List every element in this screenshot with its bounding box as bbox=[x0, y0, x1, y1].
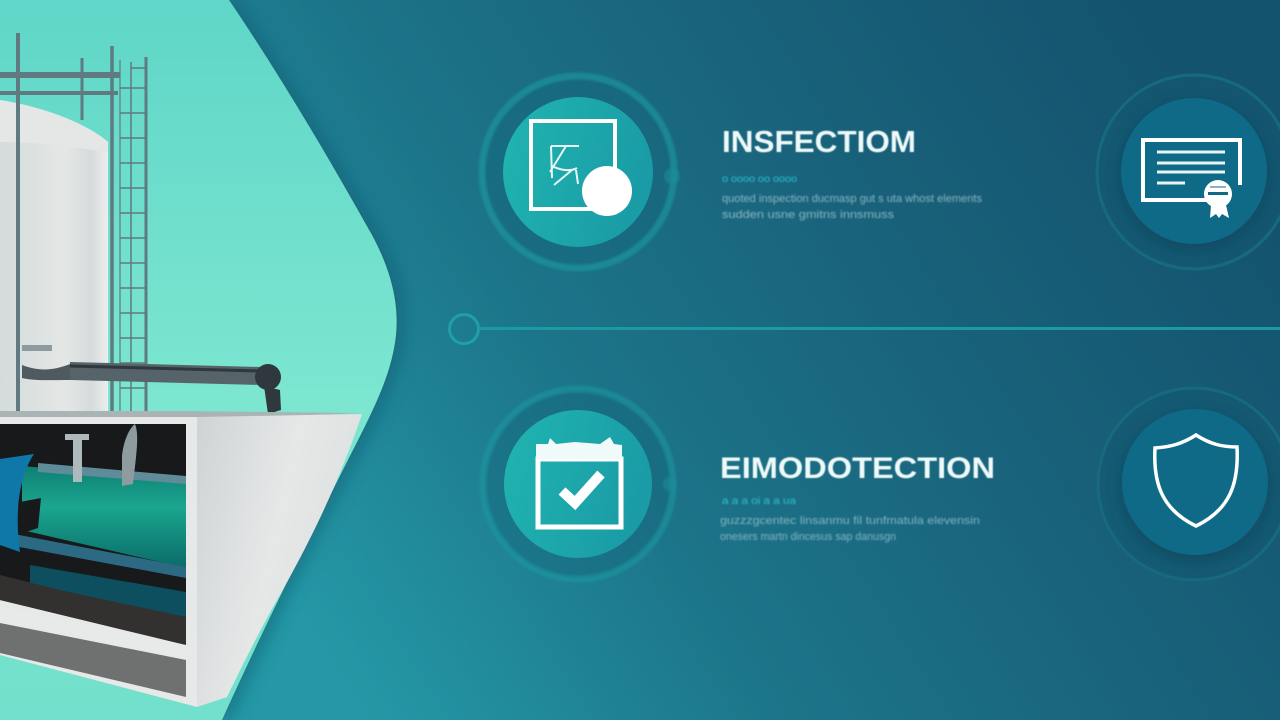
grey shelf strip bbox=[0, 575, 186, 645]
timeline node bbox=[450, 314, 478, 344]
panel: mint shape bbox=[0, 0, 397, 720]
label: inspection: o oooo oo oooo bbox=[722, 174, 797, 185]
illustration: tank and pipe machinery bbox=[0, 33, 362, 707]
heading: inspection: INSFECTIOM bbox=[722, 124, 916, 159]
step: certificate icon bbox=[1097, 75, 1280, 269]
document frame bbox=[531, 121, 615, 209]
text block: protection bbox=[720, 515, 980, 543]
check mark bbox=[562, 474, 601, 503]
pipe bbox=[22, 345, 281, 414]
magnifier disc bbox=[582, 166, 632, 216]
text block: inspection: quoted inspection ducmasp gut s uta whost elements bbox=[722, 193, 983, 205]
blue end cap bbox=[0, 454, 34, 552]
calendar header bbox=[536, 437, 622, 459]
tank dome bbox=[0, 100, 108, 153]
lower rail bbox=[14, 534, 186, 578]
panel: mint shape shadow bbox=[6, 0, 403, 720]
label: protection: a a a oi a a ua bbox=[722, 496, 797, 507]
cabinet side panel bbox=[197, 414, 362, 707]
heading: protection: EIMODOTECTION bbox=[720, 452, 995, 485]
timeline line bbox=[479, 327, 1280, 330]
shield outline bbox=[1155, 435, 1237, 526]
white shelf bbox=[0, 607, 186, 658]
teal cylinder bbox=[22, 466, 186, 568]
step: shield icon bbox=[1098, 388, 1280, 580]
valve two bbox=[122, 424, 137, 486]
tank body bbox=[0, 100, 108, 415]
text block: protection: onesers martn dincesus sap danusgn bbox=[720, 531, 896, 543]
text block: inspection bbox=[722, 193, 983, 221]
certificate frame bbox=[1143, 140, 1240, 200]
lower teal reflection bbox=[30, 565, 186, 617]
upper rail bbox=[38, 463, 186, 484]
calendar body bbox=[538, 459, 621, 527]
timeline bbox=[450, 314, 1280, 344]
certificate seal bbox=[1204, 180, 1232, 218]
step: inspection icon bbox=[482, 76, 680, 268]
end cap bracket bbox=[20, 498, 41, 534]
sketch glyph bbox=[550, 146, 579, 185]
text block: protection: guzzzgcentec linsanmu fil tunfmatula elevensin bbox=[720, 515, 980, 527]
step: calendar icon bbox=[483, 389, 677, 579]
text block: inspection: sudden usne gmitns innsmuss bbox=[722, 209, 895, 221]
certificate lines bbox=[1157, 152, 1225, 183]
cabinet frame bbox=[0, 417, 197, 707]
cabinet top bbox=[0, 411, 362, 420]
valve one bbox=[65, 434, 89, 482]
scaffold bbox=[0, 33, 146, 415]
cabinet opening bbox=[0, 424, 186, 645]
grey base panel bbox=[0, 623, 186, 697]
